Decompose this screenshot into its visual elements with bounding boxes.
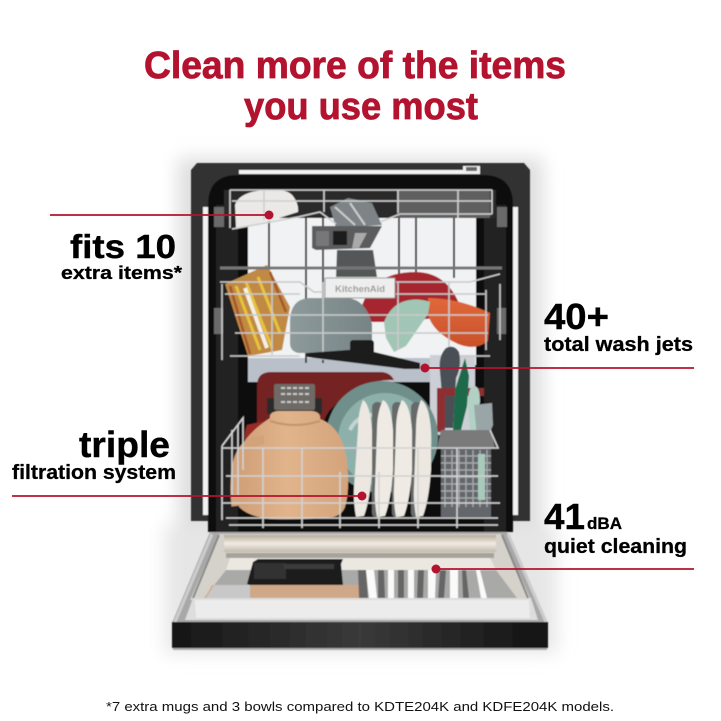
callout: fits 10 extra items xyxy=(50,210,274,283)
lower rack items xyxy=(222,347,500,528)
green plate xyxy=(326,381,438,493)
tan pitcher xyxy=(235,411,348,519)
dishwasher illustration xyxy=(172,163,548,650)
KitchenAid badge: KitchenAid xyxy=(335,284,385,295)
lower rack wires xyxy=(222,418,500,528)
cutlery basket xyxy=(437,430,495,517)
open door xyxy=(172,532,548,650)
callout: 41 dBA quiet cleaning: quiet cleaning xyxy=(544,536,687,558)
grey mug xyxy=(290,298,372,353)
top rack with bowl xyxy=(230,190,492,229)
mid rack wires xyxy=(220,268,502,360)
red tray xyxy=(257,372,394,440)
title: you use most xyxy=(244,86,478,128)
orange bowl xyxy=(428,298,490,347)
soft shadow around dishwasher xyxy=(165,158,557,653)
tub interior xyxy=(214,190,507,535)
plates xyxy=(354,400,431,518)
callout: triple filtration system xyxy=(12,424,366,500)
callout: fits 10 extra items: fits 10 xyxy=(70,228,176,265)
detergent dispenser xyxy=(247,559,343,585)
lower spray arm xyxy=(307,340,420,369)
title xyxy=(144,45,566,128)
door front panel xyxy=(172,622,548,648)
callout: 40+ total wash jets xyxy=(420,296,694,372)
callout: 40+ total wash jets: total wash jets xyxy=(544,334,693,356)
callout: 41 dBA quiet cleaning: dBA xyxy=(587,514,622,533)
callout: 41 dBA quiet cleaning xyxy=(432,496,694,574)
callout: triple filtration system: triple xyxy=(79,424,170,465)
title: Clean more of the items xyxy=(144,45,566,87)
spray arm holder xyxy=(312,226,382,277)
striped towel xyxy=(225,265,290,356)
KitchenAid badge xyxy=(325,278,395,298)
utensils xyxy=(437,347,493,437)
blender jar xyxy=(267,384,322,414)
callout: 41 dBA quiet cleaning: 41 xyxy=(544,496,585,537)
callout: triple filtration system: filtration system xyxy=(12,462,176,484)
callout: fits 10 extra items: extra items* xyxy=(61,263,182,283)
middle rack items xyxy=(220,265,502,360)
callout: 40+ total wash jets: 40+ xyxy=(544,296,609,337)
mint bowl xyxy=(384,300,430,352)
cabinet frame xyxy=(191,163,530,532)
footnote: *7 extra mugs and 3 bowls compared to KDTE204K and KDFE204K models. xyxy=(106,699,614,714)
red plate xyxy=(360,272,462,322)
